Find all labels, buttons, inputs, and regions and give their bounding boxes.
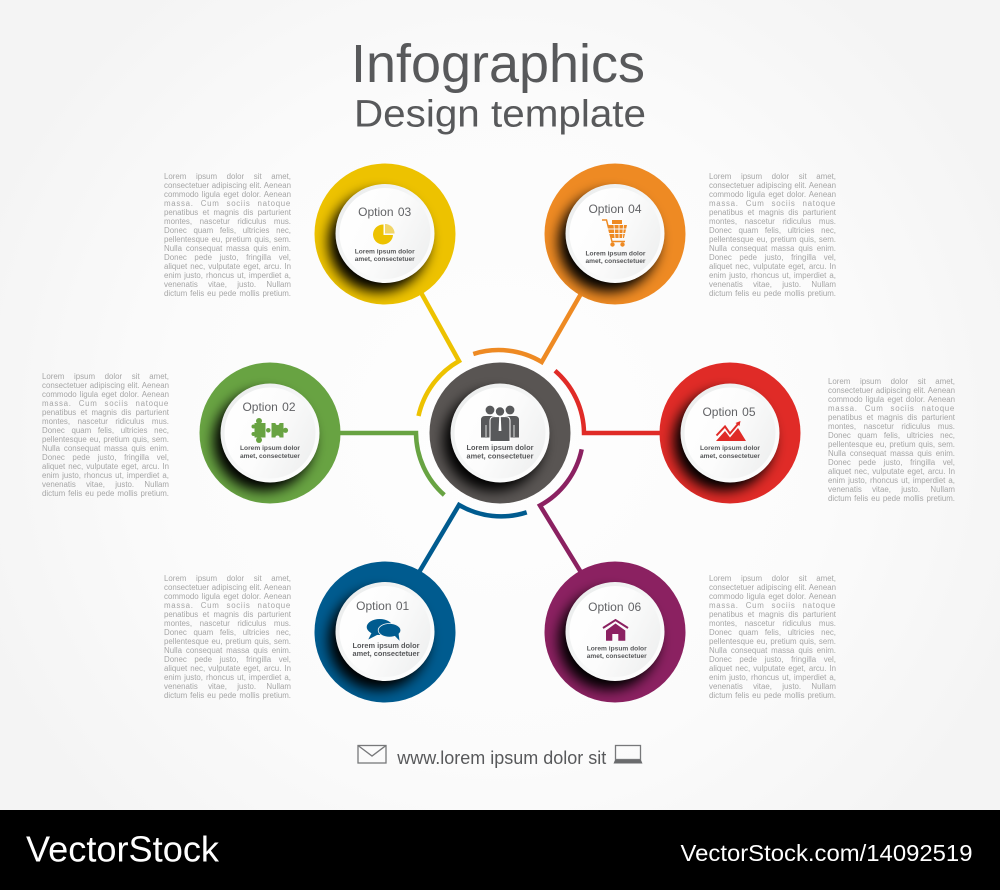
caption: amet, consectetuer [700,453,760,460]
text block: middle left: Lorem ipsum dolor sit amet, [42,372,169,381]
icon: mountain trend [716,421,746,441]
text block: top right: Donec pede justo, fringilla vel, [709,253,836,262]
text block: middle right: commodo ligula eget dolor. Aenean [828,395,955,404]
caption [355,248,415,263]
icon: puzzle pieces [252,418,288,443]
caption: Lorem ipsum dolor [587,646,647,652]
text block: middle left: venenatis vitae, justo. Nullam [42,480,169,489]
text block: bottom right: massa. Cum sociis natoque [709,601,836,610]
text block: top left: dictum felis eu pede mollis pretium. [164,289,291,298]
text block: top right: montes, nascetur ridiculus mus. [709,217,836,226]
ring: purple [544,562,686,702]
caption: Lorem ipsum dolor [355,248,415,256]
icon: envelope [358,746,386,763]
ring: green [200,362,340,504]
ring: orange [544,164,686,304]
option 03 [314,164,456,304]
text block: bottom right: Lorem ipsum dolor sit amet, [709,574,836,583]
label: Option 01 [356,599,410,613]
option 06 [544,562,686,702]
title [351,34,646,136]
text block: middle left: aliquet nec, vulputate eget, arcu. In [42,462,169,471]
footer contact [358,746,642,768]
text block: bottom right: aliquet nec, vulputate eget, arcu. In [709,664,836,673]
text block: bottom right: Donec quam felis, ultricies nec, [709,628,836,637]
text block: middle right: dictum felis eu pede mollis pretium. [828,494,955,503]
connector: option 05 red [555,371,664,433]
watermark url: VectorStock.com/14092519 [680,840,972,866]
text block: bottom left: consectetuer adipiscing elit. Aenean [164,583,291,592]
caption: amet, consectetuer [352,649,420,658]
text block: top right: venenatis vitae, justo. Nullam [709,280,836,289]
text block: top right: massa. Cum sociis natoque [709,199,836,208]
text block: top left: Donec pede justo, fringilla vel, [164,253,291,262]
label: Option 02 [242,400,296,414]
text block: top right: penatibus et magnis dis parturient [709,208,836,217]
text block: top right: aliquet nec, vulputate eget, arcu. In [709,262,836,271]
text block: middle right: Lorem ipsum dolor sit amet, [828,377,955,386]
icon: team of people [481,406,519,442]
icon: pie chart [373,224,395,244]
icon: laptop [614,746,642,764]
text block: bottom right: venenatis vitae, justo. Nullam [709,682,836,691]
caption [587,646,647,660]
icon: shopping cart [602,220,627,247]
text block: middle right: montes, nascetur ridiculus mus. [828,422,955,431]
caption [586,250,646,265]
text block: middle right [828,377,955,503]
text block: middle left: montes, nascetur ridiculus mus. [42,417,169,426]
text block: bottom right: dictum felis eu pede mollis pretium. [709,691,836,700]
caption [700,445,760,460]
text block: bottom right [709,574,836,700]
caption: amet, consectetuer [355,256,415,263]
hub caption: Lorem ipsum dolor [466,443,534,452]
caption [240,445,300,460]
connector: option 01 blue [418,505,527,574]
text block: bottom left: Lorem ipsum dolor sit amet, [164,574,291,583]
caption: amet, consectetuer [587,653,647,660]
website text: www.lorem ipsum dolor sit [396,747,606,768]
text block: bottom left: venenatis vitae, justo. Nullam [164,682,291,691]
text block: top left [164,172,291,298]
caption: amet, consectetuer [240,453,300,460]
text block: middle right: penatibus et magnis dis parturient [828,413,955,422]
text block: bottom left: penatibus et magnis dis parturient [164,610,291,619]
text block: middle left: dictum felis eu pede mollis pretium. [42,489,169,498]
text block: bottom left: enim justo, rhoncus ut, imperdiet a, [164,673,291,682]
watermark bar [0,810,1000,890]
caption: Lorem ipsum dolor [240,445,300,452]
text block: middle right: Donec quam felis, ultricies nec, [828,431,955,440]
label: Option 04 [588,202,642,216]
ring: blue [314,562,456,702]
text block: bottom right: montes, nascetur ridiculus mus. [709,619,836,628]
text block: bottom left: Nulla consequat massa quis enim. [164,646,291,655]
text block: middle left: Donec quam felis, ultricies nec, [42,426,169,435]
text block: top left: venenatis vitae, justo. Nullam [164,280,291,289]
text block: middle right: Donec pede justo, fringilla vel, [828,458,955,467]
connector: option 02 green [336,433,444,495]
text block: middle right: venenatis vitae, justo. Nullam [828,485,955,494]
text block: middle left: consectetuer adipiscing elit. Aenean [42,381,169,390]
text block: middle left: commodo ligula eget dolor. Aenean [42,390,169,399]
text block: bottom right: consectetuer adipiscing elit. Aenean [709,583,836,592]
caption: Lorem ipsum dolor [352,641,420,650]
text block: middle right: Nulla consequat massa quis enim. [828,449,955,458]
text block: middle right: enim justo, rhoncus ut, imperdiet a, [828,476,955,485]
text block: middle left: pellentesque eu, pretium quis, sem. [42,435,169,444]
hub ring [430,362,570,504]
hub caption: amet, consectetuer [466,452,534,460]
text block: top left: massa. Cum sociis natoque [164,199,291,208]
text block: top right: Donec quam felis, ultricies nec, [709,226,836,235]
option 05 [660,362,800,504]
ring: yellow [314,164,456,304]
text block: middle left: enim justo, rhoncus ut, imperdiet a, [42,471,169,480]
ring: red [660,362,800,504]
connector: option 04 orange [473,292,582,362]
text block: bottom right: Donec pede justo, fringilla vel, [709,655,836,664]
text block: top left: Nulla consequat massa quis enim. [164,244,291,253]
text block: middle right: pellentesque eu, pretium quis, sem. [828,440,955,449]
caption: Lorem ipsum dolor [700,445,760,452]
text block: bottom right: enim justo, rhoncus ut, imperdiet a, [709,673,836,682]
text block: bottom left: commodo ligula eget dolor. Aenean [164,592,291,601]
option 04 [544,164,686,304]
text block: bottom left: aliquet nec, vulputate eget, arcu. In [164,664,291,673]
text block: top right: enim justo, rhoncus ut, imperdiet a, [709,271,836,280]
label: Option 05 [702,405,756,419]
text block: middle left: penatibus et magnis dis parturient [42,408,169,417]
icon: speech bubbles [367,619,401,641]
heading: Design template: Design template [354,94,646,136]
icon: house [603,620,628,641]
text block: top right: Nulla consequat massa quis enim. [709,244,836,253]
label: Option 03 [358,205,412,219]
connector: option 06 purple [540,449,582,574]
text block: bottom left: massa. Cum sociis natoque [164,601,291,610]
text block: top left: Lorem ipsum dolor sit amet, [164,172,291,181]
heading: Infographics: Infographics [351,34,645,94]
text block: top right: consectetuer adipiscing elit. Aenean [709,181,836,190]
text block: top left: aliquet nec, vulputate eget, arcu. In [164,262,291,271]
text block: top right: commodo ligula eget dolor. Aenean [709,190,836,199]
text block: top left: penatibus et magnis dis parturient [164,208,291,217]
text block: top left: commodo ligula eget dolor. Aenean [164,190,291,199]
watermark logo: VectorStock [26,829,220,870]
text block: bottom left: Donec pede justo, fringilla vel, [164,655,291,664]
caption [352,641,420,658]
caption: Lorem ipsum dolor [586,250,646,258]
text block: middle right: consectetuer adipiscing elit. Aenean [828,386,955,395]
text block: middle left: Donec pede justo, fringilla vel, [42,453,169,462]
text block: top left: Donec quam felis, ultricies nec, [164,226,291,235]
option 01 [314,562,456,702]
caption: amet, consectetuer [586,258,646,265]
text block: top right: Lorem ipsum dolor sit amet, [709,172,836,181]
text block: bottom left: Donec quam felis, ultricies nec, [164,628,291,637]
text block: top right: dictum felis eu pede mollis pretium. [709,289,836,298]
text block: bottom right: penatibus et magnis dis parturient [709,610,836,619]
text block: top left: enim justo, rhoncus ut, imperdiet a, [164,271,291,280]
text block: middle right: massa. Cum sociis natoque [828,404,955,413]
connector: option 03 yellow [418,289,459,416]
text block: bottom left: pellentesque eu, pretium quis, sem. [164,637,291,646]
text block: bottom left: montes, nascetur ridiculus mus. [164,619,291,628]
text block: top left: pellentesque eu, pretium quis, sem. [164,235,291,244]
option 02 [200,362,340,504]
text block: middle right: aliquet nec, vulputate eget, arcu. In [828,467,955,476]
text block: middle left: massa. Cum sociis natoque [42,399,169,408]
hub caption [466,443,534,460]
text block: top left: consectetuer adipiscing elit. Aenean [164,181,291,190]
text block: middle left [42,372,169,498]
text block: bottom right: pellentesque eu, pretium quis, sem. [709,637,836,646]
text block: bottom right: commodo ligula eget dolor. Aenean [709,592,836,601]
text block: middle left: Nulla consequat massa quis enim. [42,444,169,453]
text block: top left: montes, nascetur ridiculus mus. [164,217,291,226]
text block: bottom right: Nulla consequat massa quis enim. [709,646,836,655]
text block: bottom left [164,574,291,700]
label: Option 06 [588,600,642,614]
text block: top right: pellentesque eu, pretium quis, sem. [709,235,836,244]
text block: bottom left: dictum felis eu pede mollis pretium. [164,691,291,700]
text block: top right [709,172,836,298]
center hub [430,362,570,504]
